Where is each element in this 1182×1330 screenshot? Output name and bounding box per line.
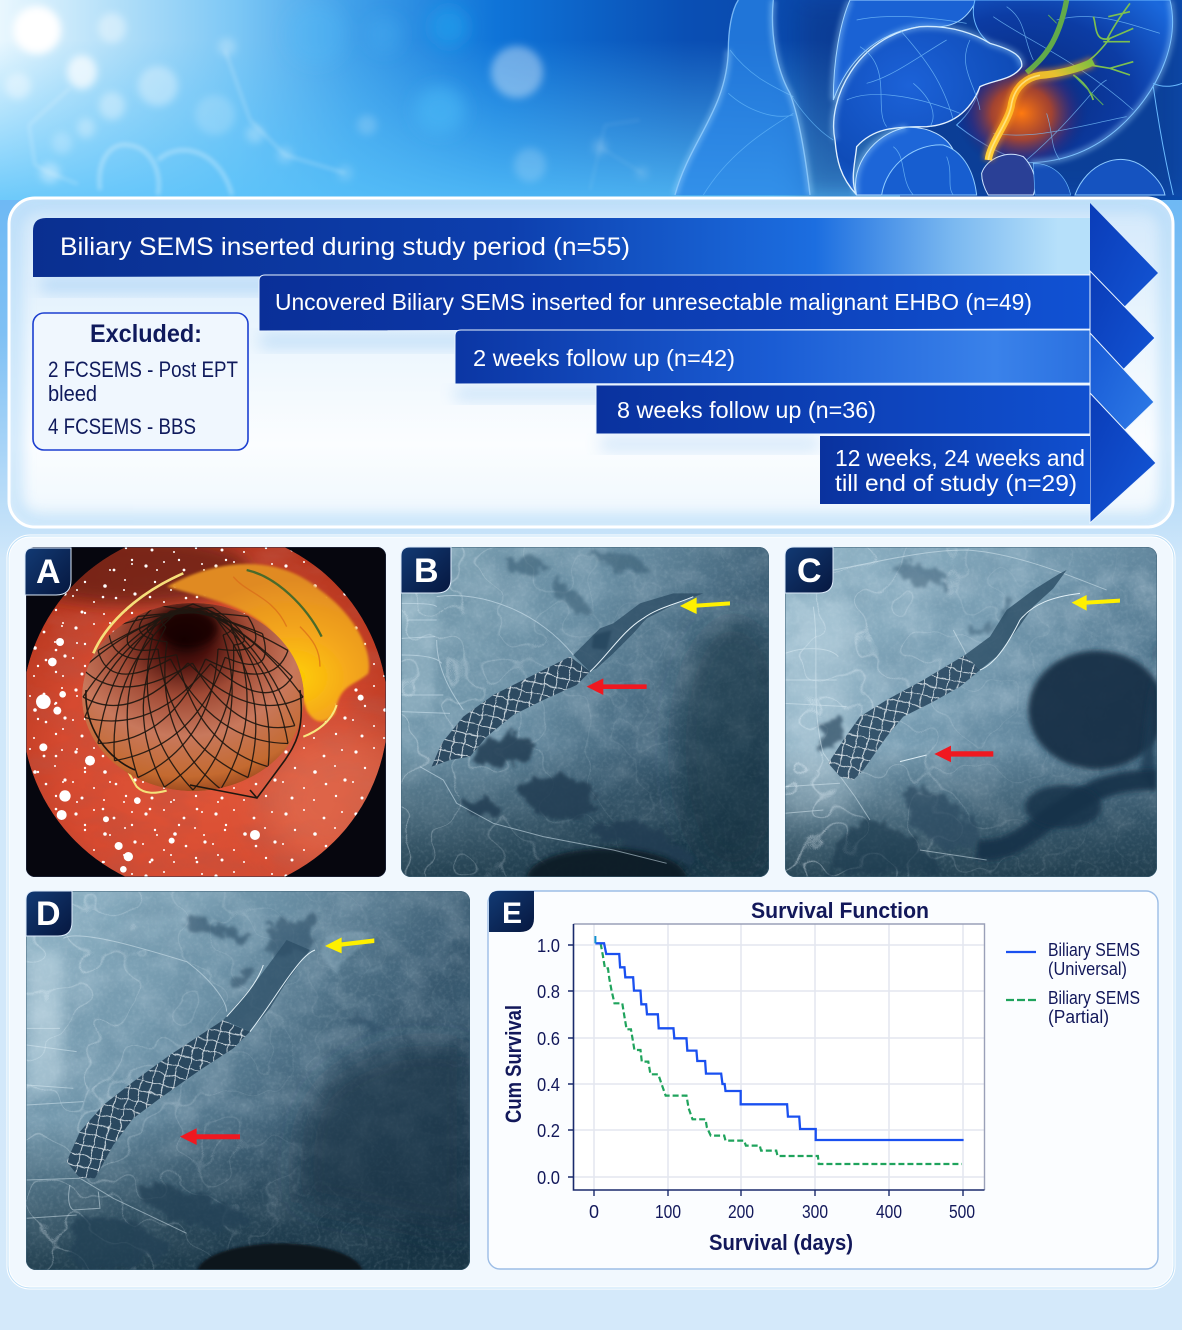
callout: excluded cases: bleed <box>48 381 97 406</box>
callout: excluded cases: Excluded: <box>90 320 202 348</box>
arrow: red <box>180 1128 240 1145</box>
stent mesh <box>82 604 304 790</box>
legend: Biliary SEMS <box>1048 940 1140 960</box>
badge A: A <box>36 553 61 591</box>
step bar: uncovered biliary SEMS <box>259 275 1090 331</box>
badge B: B <box>414 552 439 590</box>
fluoroscopy details <box>27 915 470 1303</box>
legend: Biliary SEMS <box>1048 988 1140 1008</box>
arrow: red <box>934 746 993 762</box>
specular highlights <box>36 638 364 873</box>
arrow head: step 2 <box>1090 271 1155 400</box>
step bar: 8 weeks follow up: 8 weeks follow up (n=36) <box>617 397 876 423</box>
step bar: 2 weeks follow up: 2 weeks follow up (n=42) <box>473 345 735 371</box>
step bar: 8 weeks follow up <box>596 385 1090 434</box>
badge D <box>26 891 72 936</box>
callout: excluded cases: 2 FCSEMS - Post EPT <box>48 357 238 382</box>
image B: fluoroscopy with stent <box>401 547 769 877</box>
callout: excluded cases <box>33 313 248 450</box>
arrow head: step 3 <box>1090 333 1154 462</box>
panel: study flow diagram <box>9 198 1173 527</box>
badge C <box>785 547 833 593</box>
organ rim glow <box>675 0 1173 195</box>
x axis tick labels: 400 <box>876 1202 902 1222</box>
image D: fluoroscopy with stent <box>26 891 470 1303</box>
arrow: yellow <box>680 597 730 614</box>
header banner <box>0 0 1182 200</box>
legend <box>1006 940 1140 1027</box>
curve: partial (green dashed) <box>601 943 962 1164</box>
fluoroscopy details <box>402 552 790 908</box>
legend: (Universal) <box>1048 959 1127 979</box>
arrow: yellow <box>1072 595 1120 611</box>
badge D: D <box>36 895 61 933</box>
arrow: yellow <box>325 937 374 953</box>
badge E <box>489 891 534 932</box>
y axis title: Cum Survival <box>501 1005 526 1123</box>
callout: excluded cases: 4 FCSEMS - BBS <box>48 414 196 439</box>
step bar: 12 weeks, 24 weeks and end of study: 12 weeks, 24 weeks and <box>835 445 1085 471</box>
x axis tick labels: 100 <box>655 1202 681 1222</box>
y axis tick labels: 0.6 <box>537 1029 560 1049</box>
fluoroscopy details <box>785 550 1165 873</box>
panel: imaging and survival <box>8 525 1174 1303</box>
y axis tick labels <box>537 936 560 1188</box>
step bar: 12 weeks, 24 weeks and end of study: till end of study (n=29) <box>835 470 1077 496</box>
step bar: biliary SEMS inserted: Biliary SEMS inserted during study period (n=55) <box>60 233 630 261</box>
x axis tick labels: 500 <box>949 1202 975 1222</box>
arrow head: step 5 <box>1090 393 1156 523</box>
x axis tick labels: 0 <box>589 1202 599 1222</box>
y axis tick labels: 0.2 <box>537 1121 560 1141</box>
chart title: Survival Function <box>751 898 929 923</box>
molecule bokeh background <box>5 5 648 195</box>
x axis tick labels: 200 <box>728 1202 754 1222</box>
panel E: survival chart <box>488 891 1158 1269</box>
y axis tick labels: 0.4 <box>537 1075 560 1095</box>
badge A <box>25 548 71 595</box>
y axis tick labels: 1.0 <box>537 936 560 956</box>
arrow: red <box>587 678 647 695</box>
x axis tick labels: 300 <box>802 1202 828 1222</box>
curve: universal (blue solid) <box>595 936 964 1140</box>
badge C: C <box>797 552 822 590</box>
arrow head: step 1 <box>1090 203 1158 340</box>
anatomy illustration: torso, organs and bile duct <box>675 0 1182 197</box>
x axis title: Survival (days) <box>709 1230 853 1255</box>
step bar: 12 weeks, 24 weeks and end of study <box>820 436 1090 504</box>
image A: endoscopic view of stent <box>26 547 386 877</box>
badge E: E <box>502 897 522 930</box>
y axis tick labels: 0.0 <box>537 1168 560 1188</box>
line chart: survival curves <box>537 924 985 1222</box>
legend: (Partial) <box>1048 1007 1109 1027</box>
step bar: biliary SEMS inserted <box>33 218 1090 277</box>
yellow bile crescent <box>93 564 369 793</box>
x axis tick labels <box>589 1202 975 1222</box>
badge B <box>401 547 451 593</box>
step bar: 2 weeks follow up <box>455 330 1090 384</box>
image C: fluoroscopy with stent and contrast <box>785 547 1165 877</box>
y axis tick labels: 0.8 <box>537 982 560 1002</box>
step bar: uncovered biliary SEMS: Uncovered Biliary SEMS inserted for unresectable malignant EHBO (n=49) <box>275 289 1032 315</box>
